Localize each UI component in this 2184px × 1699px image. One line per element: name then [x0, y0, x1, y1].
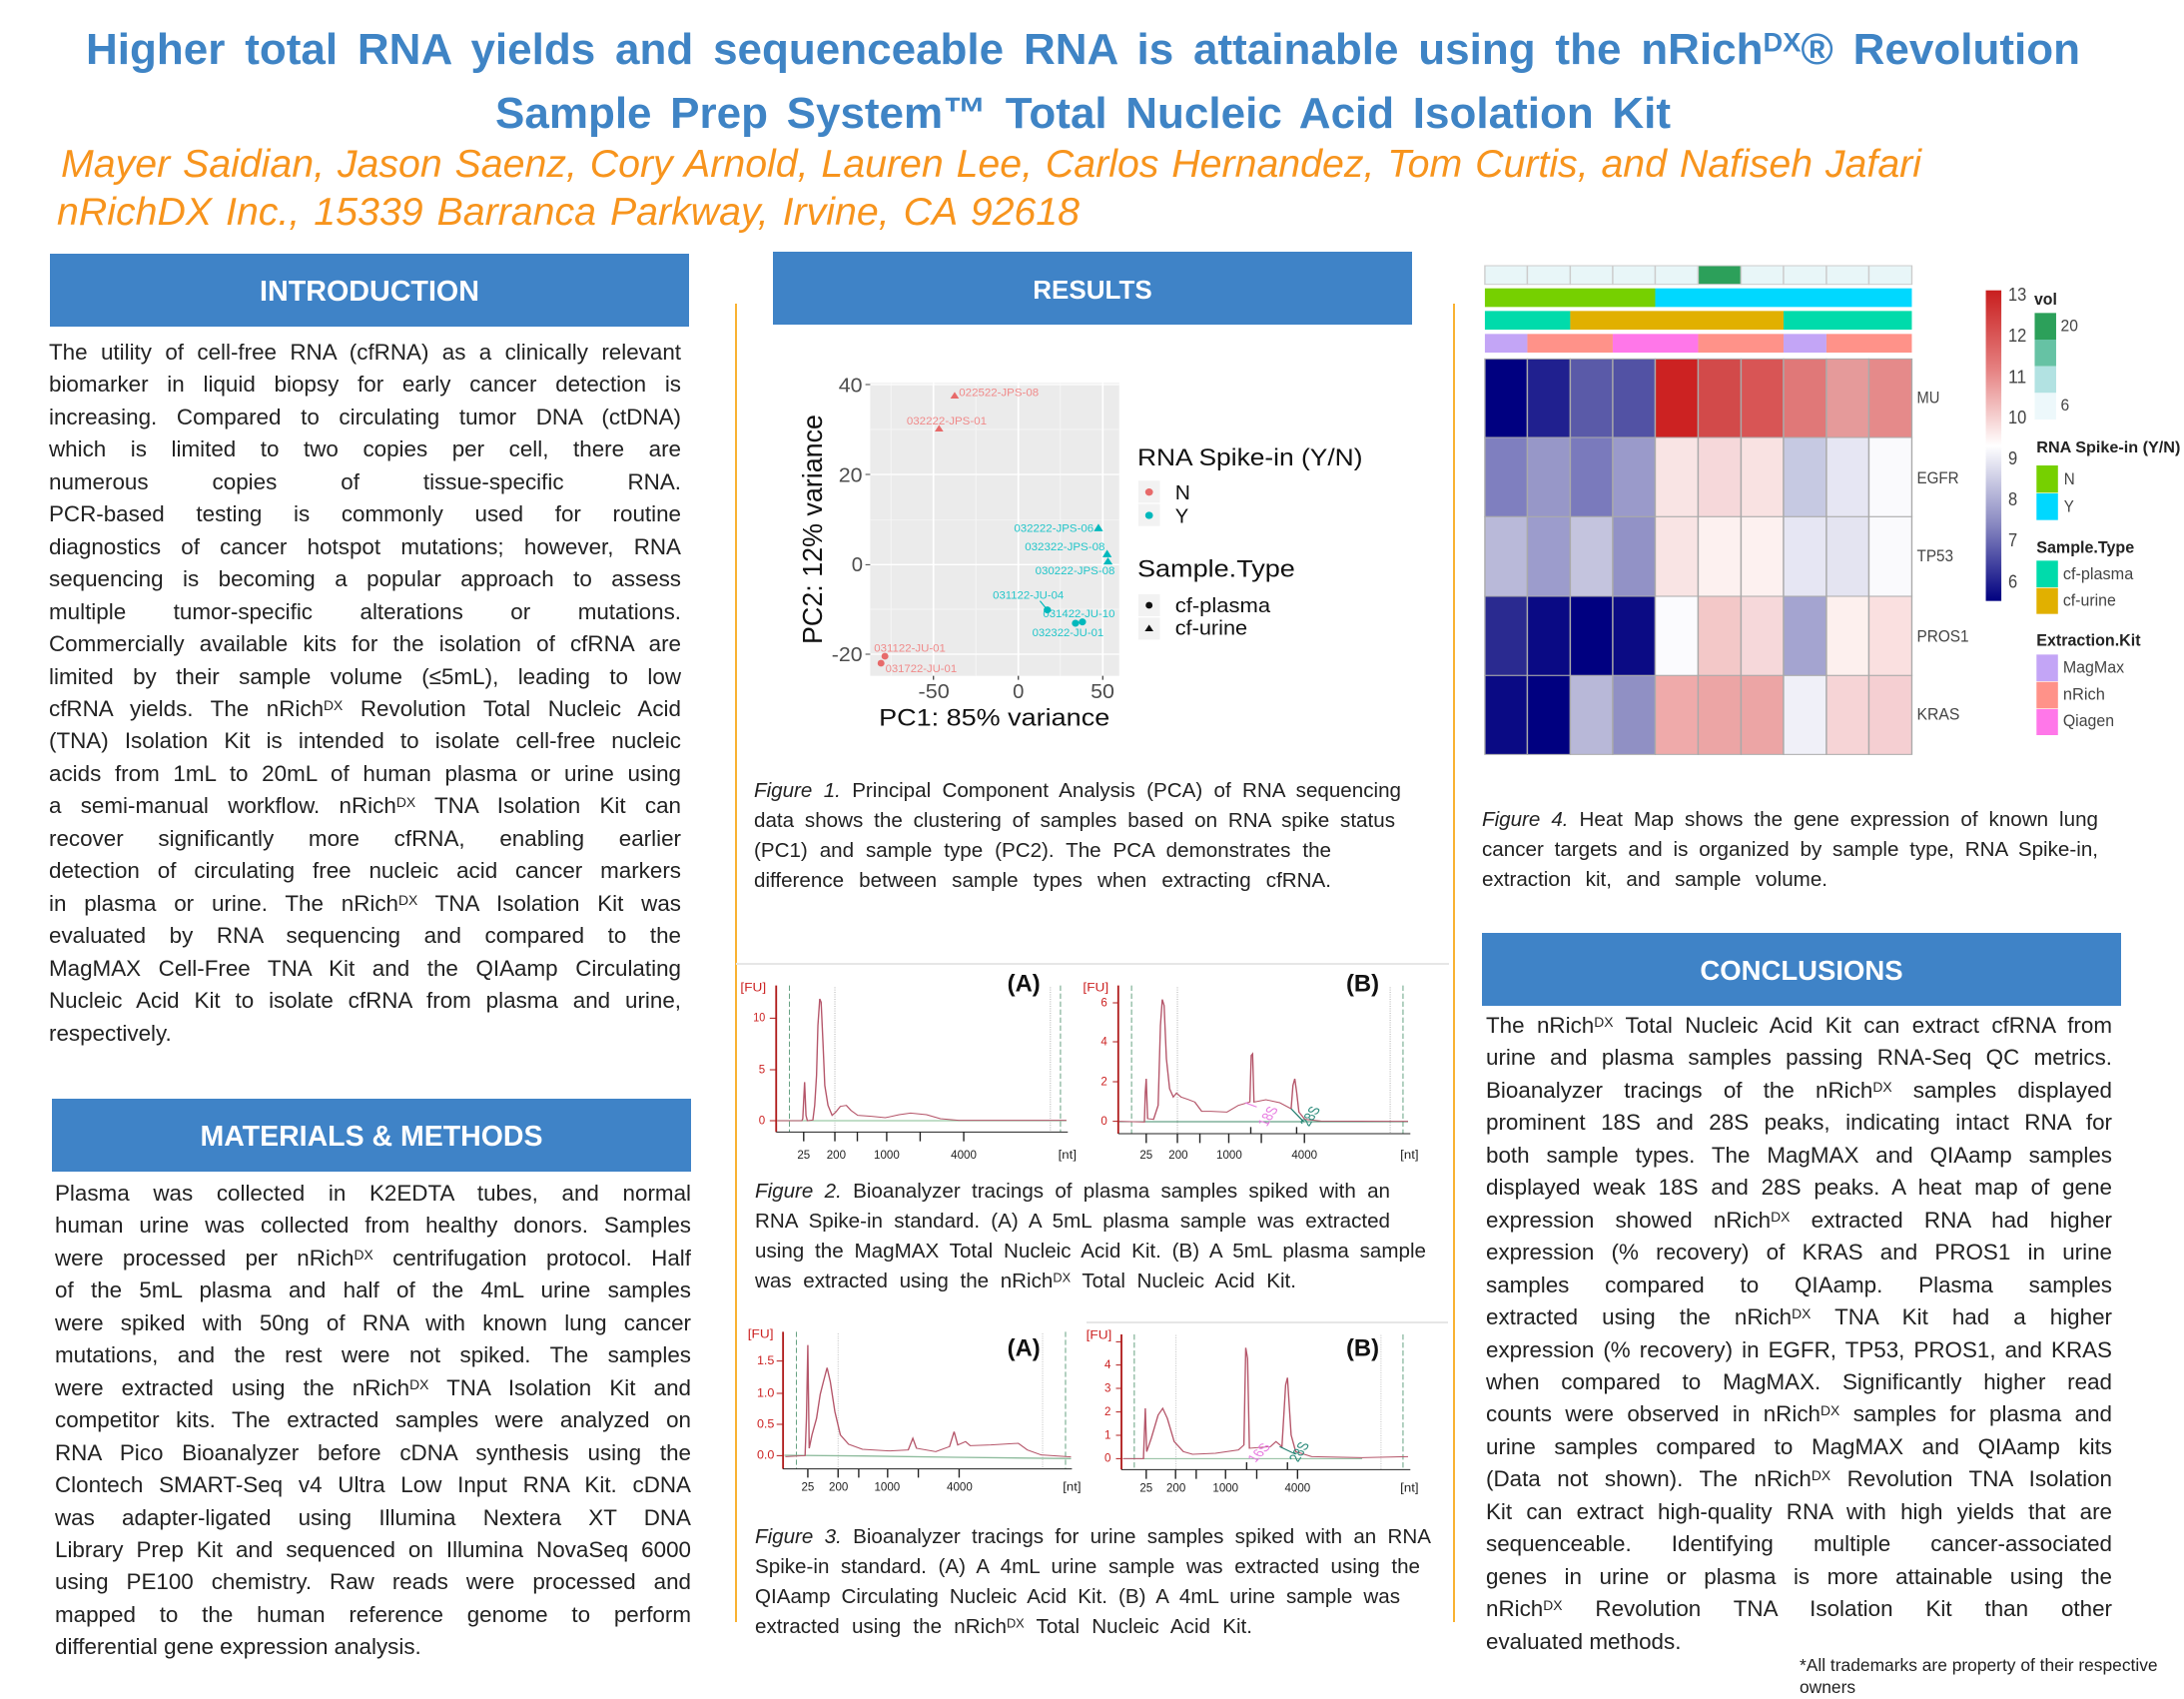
authors: Mayer Saidian, Jason Saenz, Cory Arnold, Lauren Lee, Carlos Hernandez, Tom Curtis, and Nafiseh Jafari: [61, 142, 1921, 186]
chart: PCA scatter plot: 032222-JPS-06: [1014, 521, 1093, 534]
text: materials and methods: using PE100 chemistry. Raw reads were processed and: [55, 1569, 691, 1594]
text: conclusions: Bioanalyzer tracings of the nRichDX samples displayed: [1486, 1078, 2112, 1103]
legends: Qiagen: [2063, 712, 2114, 730]
chart: PCA scatter plot: RNA Spike-in (Y/N): [1137, 443, 1362, 470]
chart: PCA scatter plot: Sample.Type: [1137, 555, 1295, 582]
trace panel A: 25: [801, 1481, 814, 1494]
trace panel A: 200: [827, 1149, 846, 1162]
chart: PCA scatter plot: 40: [839, 374, 863, 398]
trace panel A: 1.5: [757, 1354, 774, 1367]
trace panel B: 25: [1139, 1149, 1152, 1162]
caption: figure 4: Figure 4. Heat Map shows the gene expression of known lung: [1482, 808, 2098, 831]
chart: figure 4 heat map: 7: [2008, 530, 2017, 550]
footnote: *All trademarks are property of their respective: [1800, 1655, 2158, 1675]
chart: PCA scatter plot: 031422-JU-10: [1043, 607, 1114, 619]
chart: PCA scatter plot: 0: [1013, 680, 1024, 703]
chart: PCA scatter plot: 022522-JPS-08: [959, 386, 1039, 399]
footnote: [1800, 1655, 2158, 1697]
legends: cf-plasma: [2063, 565, 2134, 583]
trace panel A: [nt]: [1063, 1481, 1082, 1494]
legends: Sample.Type: [2036, 538, 2134, 556]
trace panel A: 1000: [875, 1481, 900, 1494]
legends: 20: [2061, 318, 2078, 336]
caption: figure 4: [1482, 808, 2098, 891]
chart: figure 4 heat map: 11: [2008, 367, 2026, 388]
text: materials and methods: were extracted using the nRichDX TNA Isolation Kit and: [55, 1375, 691, 1400]
text: materials and methods: differential gene expression analysis.: [55, 1634, 421, 1659]
chart: PCA scatter plot: -20: [832, 643, 863, 666]
text: introduction: [49, 340, 681, 1046]
chart: figure 4 heat map: 10: [2008, 407, 2026, 427]
text: conclusions: expression (% recovery) in EGFR, TP53, PROS1, and KRAS: [1486, 1337, 2112, 1362]
gene labels: TP53: [1916, 547, 1953, 565]
text: conclusions: Kit can extract high-quality RNA with high yields that are: [1486, 1499, 2112, 1524]
title: Sample Prep System™ Total Nucleic Acid Isolation Kit: [495, 89, 1671, 138]
caption: figure 2: RNA Spike-in standard. (A) A 5mL plasma sample was extracted: [755, 1210, 1390, 1233]
text: conclusions: expression showed nRichDX extracted RNA had higher: [1486, 1208, 2112, 1233]
text: introduction: Commercially available kits for the isolation of cfRNA are: [49, 631, 681, 656]
chart: PCA scatter plot: 031722-JU-01: [886, 662, 957, 674]
caption: figure 3: QIAamp Circulating Nucleic Acid Kit. (B) A 4mL urine sample was: [755, 1585, 1400, 1608]
trace panel A: 5: [759, 1063, 765, 1077]
heading: materials and methods: [52, 1099, 691, 1172]
trace panel B: 4: [1104, 1358, 1110, 1371]
chart: PCA scatter plot: [798, 374, 1362, 731]
trace panel B: 28S: [1285, 1440, 1313, 1463]
text: materials and methods: Library Prep Kit and sequenced on Illumina NovaSeq 6000: [55, 1537, 691, 1562]
text: introduction: respectively.: [49, 1021, 172, 1046]
text: conclusions: (Data not shown). The nRichDX Revolution TNA Isolation: [1486, 1466, 2112, 1491]
chart: PCA scatter plot: PC1: 85% variance: [879, 704, 1109, 731]
heading: conclusions: CONCLUSIONS: [1700, 955, 1903, 986]
heading: introduction: INTRODUCTION: [260, 276, 479, 308]
trace panel A: 0.5: [757, 1417, 774, 1431]
trace panel A: [nt]: [1059, 1149, 1077, 1162]
chart: PCA scatter plot: 031122-JU-01: [874, 641, 946, 654]
caption: figure 4: extraction kit, and sample volume.: [1482, 868, 1827, 891]
trace panel A: [748, 1327, 1082, 1494]
trace panel A: 10: [753, 1012, 765, 1025]
caption: figure 1: [754, 779, 1401, 892]
annotation rows: [1485, 266, 1911, 285]
text: conclusions: evaluated methods.: [1486, 1629, 1681, 1654]
trace panel A: (A): [1008, 1335, 1041, 1361]
text: materials and methods: mutations, and the rest were not spiked. The samples: [55, 1342, 691, 1367]
trace panel B: 4000: [1284, 1481, 1310, 1495]
legends: Y: [2064, 497, 2074, 515]
trace panel B: [1083, 971, 1419, 1162]
text: conclusions: extracted using the nRichDX TNA Kit had a higher: [1486, 1304, 2112, 1329]
footnote: owners: [1800, 1677, 1855, 1697]
trace panel B: 3: [1104, 1381, 1110, 1395]
caption: figure 3: Spike-in standard. (A) A 4mL urine sample was extracted using the: [755, 1555, 1420, 1578]
chart: PCA scatter plot: N: [1175, 481, 1190, 504]
trace panel B: 200: [1166, 1481, 1185, 1495]
text: materials and methods: RNA Pico Bioanalyzer before cDNA synthesis using the: [55, 1440, 691, 1465]
legends: Extraction.Kit: [2036, 632, 2141, 650]
caption: figure 3: Figure 3. Bioanalyzer tracings for urine samples spiked with an RNA: [755, 1525, 1431, 1548]
trace panel B: 0: [1100, 1115, 1107, 1128]
chart: figure 4 heat map: 6: [2008, 571, 2017, 592]
trace panel A: [FU]: [740, 982, 766, 995]
chart: PCA scatter plot: cf-plasma: [1175, 594, 1270, 616]
trace panel B: [nt]: [1400, 1481, 1419, 1495]
trace panel B: 18S: [1254, 1105, 1281, 1128]
text: introduction: biomarker in liquid biopsy for early cancer detection is: [49, 372, 681, 397]
trace panel A: 200: [829, 1481, 848, 1494]
text: introduction: in plasma or urine. The nRichDX TNA Isolation Kit was: [49, 891, 681, 916]
chart: PCA scatter plot: -50: [919, 680, 950, 703]
chart: PCA scatter plot: 032322-JPS-08: [1025, 540, 1104, 552]
caption: figure 3: extracted using the nRichDX Total Nucleic Acid Kit.: [755, 1615, 1252, 1638]
text: introduction: acids from 1mL to 20mL of human plasma or urine using: [49, 761, 681, 786]
text: materials and methods: Plasma was collected in K2EDTA tubes, and normal: [55, 1181, 691, 1206]
text: conclusions: genes in urine or plasma is more attainable using the: [1486, 1564, 2112, 1589]
legends: vol: [2034, 291, 2057, 309]
gene labels: KRAS: [1916, 705, 1959, 723]
legends: cf-urine: [2063, 592, 2116, 610]
legends: N: [2064, 470, 2075, 488]
text: introduction: The utility of cell-free RNA (cfRNA) as a clinically relevant: [49, 340, 681, 365]
trace panel B: [FU]: [1087, 1329, 1111, 1342]
legends: MagMax: [2063, 659, 2124, 677]
text: introduction: (TNA) Isolation Kit is intended to isolate cell-free nucleic: [49, 728, 681, 753]
chart: PCA scatter plot: 032322-JU-01: [1033, 626, 1103, 639]
colour scale: [1986, 291, 2001, 601]
chart: figure 4 heat map: 9: [2008, 447, 2017, 468]
trace panel A: [FU]: [748, 1327, 773, 1341]
trace panel B: 2: [1104, 1405, 1110, 1418]
trace panel B: 1: [1104, 1428, 1110, 1442]
text: introduction: evaluated by RNA sequencing and compared to the: [49, 923, 681, 948]
caption: figure 2: Figure 2. Bioanalyzer tracings of plasma samples spiked with an: [755, 1180, 1390, 1203]
text: materials and methods: Clontech SMART-Seq v4 Ultra Low Input RNA Kit. cDNA: [55, 1472, 691, 1497]
text: conclusions: prominent 18S and 28S peaks, indicating intact RNA for: [1486, 1110, 2112, 1135]
trace panel B: (B): [1346, 1335, 1379, 1361]
legends: [2034, 291, 2180, 735]
chart: PCA scatter plot: 030222-JPS-08: [1036, 564, 1114, 577]
trace panel B: 1000: [1216, 1149, 1242, 1162]
text: conclusions: nRichDX Revolution TNA Isolation Kit than other: [1486, 1596, 2112, 1621]
heading: results: [773, 252, 1412, 325]
caption: figure 2: [755, 1180, 1426, 1292]
chart: figure 4 heat map: 8: [2008, 489, 2017, 509]
trace panel A: 1000: [874, 1149, 900, 1162]
text: introduction: sequencing is becoming a popular approach to assess: [49, 566, 681, 591]
legends: nRich: [2063, 685, 2105, 703]
text: materials and methods: [55, 1181, 691, 1659]
trace panel A: 4000: [951, 1149, 977, 1162]
trace panel B: 4000: [1291, 1149, 1317, 1162]
text: conclusions: expression (% recovery) of KRAS and PROS1 in urine: [1486, 1240, 2112, 1265]
trace panel B: (B): [1346, 971, 1379, 997]
chart: PCA scatter plot: cf-urine: [1175, 616, 1247, 639]
text: introduction: cfRNA yields. The nRichDX Revolution Total Nucleic Acid: [49, 696, 681, 721]
chart: figure 4 heat map: 12: [2008, 326, 2026, 346]
text: conclusions: samples compared to QIAamp. Plasma samples: [1486, 1273, 2112, 1297]
chart: PCA scatter plot: 032222-JPS-01: [907, 415, 987, 427]
caption: figure 4: cancer targets and is organized by sample type, RNA Spike-in,: [1482, 838, 2098, 861]
text: conclusions: [1486, 1013, 2112, 1654]
trace panel A: 4000: [947, 1481, 973, 1494]
chart: figure 3 bioanalyzer tracings: [748, 1327, 1419, 1495]
text: introduction: PCR-based testing is commonly used for routine: [49, 501, 681, 526]
heat cells: [1485, 359, 1911, 754]
chart: figure 4 heat map: 13: [2008, 285, 2026, 305]
chart: figure 4 heat map: [1484, 266, 2180, 755]
text: conclusions: sequenceable. Identifying multiple cancer-associated: [1486, 1531, 2112, 1556]
chart: PCA scatter plot: Y: [1175, 504, 1188, 527]
text: materials and methods: were spiked with 50ng of RNA with known lung cancer: [55, 1310, 691, 1335]
text: introduction: detection of circulating free nucleic acid cancer markers: [49, 858, 681, 883]
text: materials and methods: were processed per nRichDX centrifugation protocol. Half: [55, 1246, 691, 1271]
text: introduction: MagMAX Cell-Free TNA Kit and the QIAamp Circulating: [49, 956, 681, 981]
text: introduction: recover significantly more cfRNA, enabling earlier: [49, 826, 681, 851]
trace panel B: 4: [1100, 1035, 1107, 1049]
trace panel B: [FU]: [1083, 982, 1108, 995]
gene labels: MU: [1916, 389, 1939, 407]
text: materials and methods: mapped to the human reference genome to perform: [55, 1602, 691, 1627]
trace panel A: 1.0: [757, 1386, 774, 1400]
chart: figure 2 bioanalyzer tracings: [740, 971, 1419, 1162]
caption: figure 2: using the MagMAX Total Nucleic Acid Kit. (B) A 5mL plasma sample: [755, 1240, 1426, 1263]
text: conclusions: counts were observed in nRichDX samples for plasma and: [1486, 1401, 2112, 1426]
text: conclusions: The nRichDX Total Nucleic Acid Kit can extract cfRNA from: [1486, 1013, 2112, 1038]
gene labels: [1916, 389, 1969, 723]
chart: PCA scatter plot: 031122-JU-04: [993, 588, 1064, 601]
trace panel B: 0: [1104, 1452, 1110, 1465]
caption: figure 1: (PC1) and sample type (PC2). The PCA demonstrates the: [754, 839, 1331, 862]
text: introduction: Nucleic Acid Kit to isolate cfRNA from plasma and urine,: [49, 988, 681, 1013]
text: materials and methods: competitor kits. The extracted samples were analyzed on: [55, 1407, 691, 1432]
trace panel B: 16S: [1244, 1441, 1274, 1464]
text: introduction: which is limited to two copies per cell, there are: [49, 436, 681, 461]
trace panel B: 28S: [1296, 1105, 1324, 1128]
trace panel B: 2: [1100, 1075, 1107, 1089]
caption: figure 2: was extracted using the nRichDX Total Nucleic Acid Kit.: [755, 1270, 1296, 1292]
text: materials and methods: was adapter-ligated using Illumina Nextera XT DNA: [55, 1505, 691, 1530]
text: materials and methods: human urine was collected from healthy donors. Samples: [55, 1213, 691, 1238]
trace panel B: 1000: [1212, 1481, 1238, 1495]
caption: figure 1: difference between sample types when extracting cfRNA.: [754, 869, 1331, 892]
text: introduction: limited by their sample volume (≤5mL), leading to low: [49, 664, 681, 689]
trace panel A: 0: [759, 1114, 765, 1128]
chart: PCA scatter plot: 50: [1091, 680, 1114, 703]
text: introduction: diagnostics of cancer hotspot mutations; however, RNA: [49, 534, 681, 559]
text: introduction: increasing. Compared to circulating tumor DNA (ctDNA): [49, 405, 681, 429]
trace panel A: (A): [1008, 971, 1041, 997]
title: Higher total RNA yields and sequenceable RNA is attainable using the nRichDX® Revolution: [86, 25, 2080, 74]
chart: PCA scatter plot: PC2: 12% variance: [798, 415, 829, 644]
text: conclusions: when compared to MagMAX. Significantly higher read: [1486, 1369, 2112, 1394]
trace panel B: [nt]: [1400, 1149, 1419, 1162]
heading: introduction: [50, 254, 689, 327]
trace panel B: 25: [1139, 1481, 1152, 1495]
trace panel A: 25: [797, 1149, 810, 1162]
trace panel B: [1087, 1329, 1419, 1495]
title: [86, 25, 2080, 138]
text: introduction: numerous copies of tissue-specific RNA.: [49, 469, 681, 494]
text: conclusions: both sample types. The MagMAX and QIAamp samples: [1486, 1143, 2112, 1168]
affiliation: nRichDX Inc., 15339 Barranca Parkway, Irvine, CA 92618: [57, 190, 1080, 234]
trace panel A: 0.0: [757, 1449, 774, 1462]
text: introduction: multiple tumor-specific alterations or mutations.: [49, 599, 681, 624]
gene labels: PROS1: [1916, 627, 1969, 645]
text: conclusions: displayed weak 18S and 28S peaks. A heat map of gene: [1486, 1175, 2112, 1200]
caption: figure 3: [755, 1525, 1431, 1638]
text: conclusions: urine samples compared to MagMAX and QIAamp kits: [1486, 1434, 2112, 1459]
text: conclusions: urine and plasma samples passing RNA-Seq QC metrics.: [1486, 1045, 2112, 1070]
caption: figure 1: data shows the clustering of samples based on RNA spike status: [754, 809, 1395, 832]
heading: materials and methods: MATERIALS & METHODS: [200, 1121, 543, 1153]
gene labels: EGFR: [1916, 469, 1959, 487]
trace panel A: [740, 971, 1077, 1162]
legends: 6: [2061, 397, 2069, 415]
trace panel B: 6: [1100, 996, 1107, 1010]
trace panel B: 200: [1168, 1149, 1188, 1162]
caption: figure 1: Figure 1. Principal Component Analysis (PCA) of RNA sequencing: [754, 779, 1401, 802]
heading: conclusions: [1482, 933, 2121, 1006]
heading: results: RESULTS: [1033, 275, 1152, 305]
chart: PCA scatter plot: 20: [839, 463, 863, 487]
text: materials and methods: of the 5mL plasma and half of the 4mL urine samples: [55, 1277, 691, 1302]
text: introduction: a semi-manual workflow. nRichDX TNA Isolation Kit can: [49, 793, 681, 818]
chart: PCA scatter plot: 0: [852, 553, 863, 576]
